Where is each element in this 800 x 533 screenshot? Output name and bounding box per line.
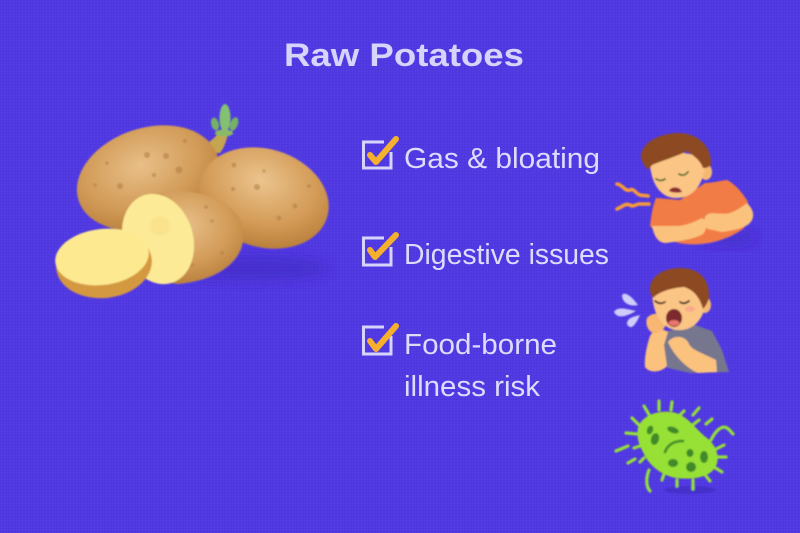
face xyxy=(655,301,689,303)
hair xyxy=(641,133,711,169)
arms xyxy=(652,218,707,243)
item: gas and bloating xyxy=(364,139,600,175)
label: illness risk xyxy=(404,371,541,403)
shadow under potatoes xyxy=(170,256,330,280)
checkbox icon xyxy=(364,326,396,354)
item: digestive issues xyxy=(364,235,609,271)
arms and hands xyxy=(645,329,668,371)
illustration: boy coughing xyxy=(614,268,729,373)
label: Gas & bloating xyxy=(404,143,600,175)
illustration: boy with stomach ache xyxy=(617,133,758,245)
germ markings xyxy=(646,425,708,472)
illustration: raw potatoes xyxy=(52,104,341,303)
germ body xyxy=(637,412,718,479)
potato: back right xyxy=(187,132,341,264)
potato: cut half xyxy=(111,185,244,293)
cough droplets xyxy=(614,294,640,327)
head xyxy=(699,297,711,313)
gas squiggles xyxy=(617,184,649,209)
face xyxy=(656,172,688,180)
cut face xyxy=(111,185,205,293)
checkbox icon xyxy=(364,139,396,168)
label: Digestive issues xyxy=(404,239,609,271)
hair xyxy=(650,268,709,309)
potato: back left with sprout xyxy=(63,104,240,248)
potato slice xyxy=(52,223,155,303)
label: Food-borne xyxy=(404,329,557,361)
germ spikes xyxy=(616,401,733,491)
checklist xyxy=(364,139,609,403)
checkbox icon xyxy=(364,235,396,265)
title: Raw Potatoes xyxy=(284,37,524,73)
shirt xyxy=(657,325,729,373)
shirt xyxy=(650,180,748,244)
illustration: green germ xyxy=(616,401,733,494)
head xyxy=(700,164,712,180)
item: food-borne illness risk xyxy=(364,326,557,403)
